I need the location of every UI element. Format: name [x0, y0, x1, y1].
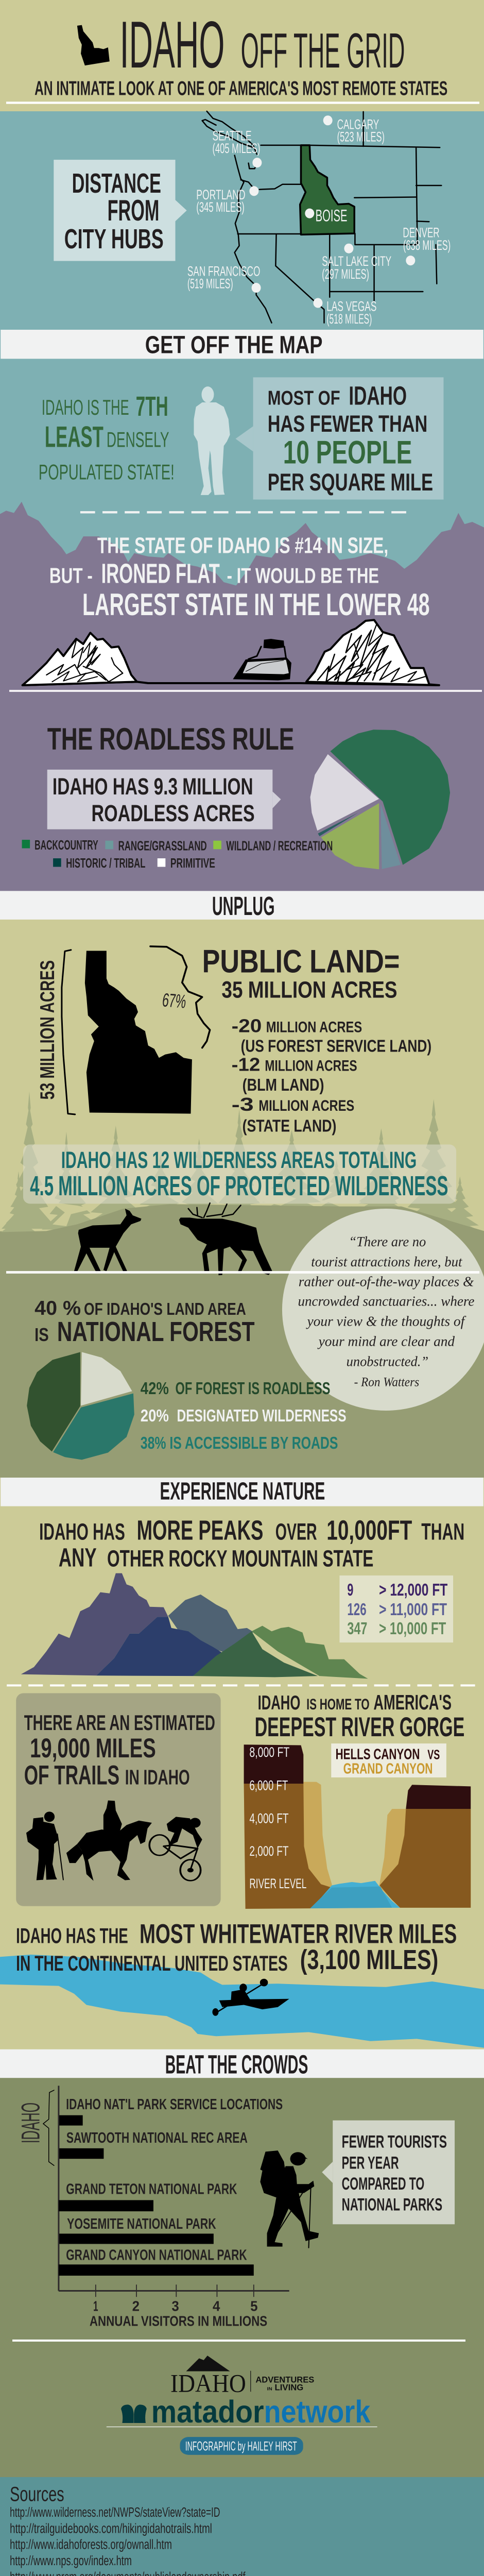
axis numbers: 1	[93, 2299, 98, 2314]
legend: forest stats	[141, 1379, 347, 1453]
city labels: LAS VEGAS	[326, 299, 376, 314]
heading: more peaks: OVER	[275, 1519, 317, 1545]
icon: Idaho state silhouette	[77, 25, 110, 65]
icon: right mountain	[306, 620, 439, 685]
legend: peak counts: 347	[347, 1619, 367, 1638]
city labels: CALGARY	[337, 117, 379, 132]
bar labels: GRAND TETON NATIONAL PARK	[66, 2181, 237, 2197]
illustration: mountains and iron	[23, 620, 439, 685]
right curly bracket	[150, 946, 210, 1048]
legend: canyons: VS	[427, 1747, 440, 1762]
legend: peak counts: 126	[347, 1600, 367, 1619]
text: DENSELY	[107, 428, 169, 452]
text block: whitewater river miles: IDAHO HAS THE	[16, 1923, 128, 1947]
city labels: (523 MILES)	[337, 129, 385, 144]
legend: forest stats: 20%	[141, 1406, 169, 1425]
Idaho highlighted on the map	[300, 145, 354, 234]
heading: public land	[202, 943, 400, 1003]
axes	[59, 2086, 289, 2297]
sources list: Sources	[10, 2482, 64, 2505]
city labels: (518 MILES)	[326, 311, 372, 327]
axis numbers: 4	[213, 2299, 220, 2314]
text block: 40 percent national forest: 40 %	[34, 1296, 81, 1319]
text block: ironed flat largest state	[49, 534, 429, 622]
bar labels	[66, 2096, 283, 2263]
callout: fewer tourists per year	[322, 2121, 455, 2224]
sources list: http://www.wilderness.net/NWPS/stateView?state=ID	[10, 2504, 220, 2520]
quote: Ron Watters	[282, 1209, 484, 1411]
list: public land breakdown: MILLION ACRES	[258, 1097, 354, 1114]
text: POPULATED STATE!	[39, 460, 175, 484]
city labels: (297 MILES)	[322, 266, 369, 282]
elevation labels	[249, 1744, 306, 1891]
illustration: Idaho 67 percent public land: 67%	[161, 990, 187, 1012]
logo text: IN	[267, 2387, 272, 2392]
bar labels: YOSEMITE NATIONAL PARK	[67, 2215, 216, 2232]
text block: 7th least densely populated: 7TH	[136, 391, 168, 422]
callout: 9.3 million roadless acres	[47, 770, 281, 829]
logo: Idaho Adventures in Living	[170, 2355, 314, 2398]
logo: matador network: matador	[151, 2394, 264, 2429]
callout: fewer tourists per year: PER YEAR	[342, 2153, 399, 2173]
quote: Ron Watters: - Ron Watters	[354, 1375, 419, 1389]
icon: left mountain	[23, 633, 137, 685]
sources list	[10, 2482, 460, 2576]
heading: more peaks: IDAHO HAS	[39, 1519, 125, 1545]
logo text: IDAHO	[170, 2369, 246, 2398]
text block: 7th least densely populated	[39, 391, 175, 484]
city markers	[249, 115, 415, 308]
list: public land breakdown: -20	[232, 1016, 262, 1037]
background: beat the crowds olive	[0, 2078, 484, 2576]
list: public land breakdown: -12	[232, 1055, 260, 1075]
sources list: http://www.nps.gov/index.htm	[10, 2553, 132, 2568]
list: public land breakdown: (BLM LAND)	[243, 1076, 324, 1094]
ground: forest floor	[0, 1204, 484, 1256]
label: Idaho brace	[17, 2090, 54, 2165]
callout: 9.3 million roadless acres: IDAHO HAS 9.3 MILLION	[53, 773, 253, 800]
panel: miles of trails: OF TRAILS	[24, 1759, 119, 1790]
quote: Ron Watters: “There are no	[349, 1234, 426, 1249]
sources list: http://www.idahoforests.org/ownall.htm	[10, 2537, 172, 2552]
callout: distance from city hubs: CITY HUBS	[64, 223, 164, 255]
text block: 40 percent national forest: NATIONAL FOREST	[57, 1316, 255, 1347]
left bracket	[62, 950, 75, 1114]
callout: distance from city hubs: FROM	[108, 194, 159, 227]
mountain range backdrop	[0, 502, 484, 598]
legend: PRIMITIVE	[170, 856, 215, 871]
city labels: DENVER	[403, 225, 440, 240]
city labels: (405 MILES)	[212, 141, 260, 156]
text: INFOGRAPHIC by HAILEY HIRST	[185, 2439, 297, 2453]
callout: fewer than 10 people per square mile: MOST OF	[268, 386, 340, 409]
list: public land breakdown: MILLION ACRES	[265, 1057, 357, 1074]
text block: 7th least densely populated: LEAST	[45, 420, 103, 453]
bar chart: annual visitors in millions	[17, 2086, 289, 2329]
city labels: (519 MILES)	[187, 276, 233, 291]
list: public land breakdown	[232, 1016, 431, 1136]
icon: hiker	[26, 1811, 63, 1880]
callout: fewer than 10 people per square mile: IDAHO	[349, 381, 407, 411]
list: public land breakdown: MILLION ACRES	[266, 1018, 362, 1036]
city labels: SEATTLE	[212, 128, 252, 143]
axis numbers: ANNUAL VISITORS IN MILLIONS	[90, 2314, 267, 2329]
callout: fewer than 10 people per square mile	[235, 377, 443, 500]
text block: 40 percent national forest	[34, 1296, 255, 1347]
legend: canyons	[331, 1743, 446, 1777]
bar labels: SAWTOOTH NATIONAL REC AREA	[66, 2129, 248, 2146]
background: sources teal	[0, 2477, 484, 2576]
legend: BACKCOUNTRY	[34, 838, 98, 853]
heading: deepest river gorge	[255, 1691, 464, 1742]
title block: IDAHO	[120, 7, 224, 81]
legend: forest stats: 42%	[141, 1379, 169, 1398]
text block: ironed flat largest state: BUT -	[49, 563, 93, 587]
section heading: unplug	[0, 891, 484, 921]
logo: matador network	[107, 2394, 377, 2429]
quote: Ron Watters: unobstructed.”	[347, 1353, 428, 1369]
icon: logo mountain	[186, 2355, 230, 2371]
bar labels: IDAHO NAT'L PARK SERVICE LOCATIONS	[66, 2096, 283, 2113]
city labels: BOISE	[316, 207, 347, 225]
text block: 7th least densely populated: IDAHO IS THE	[42, 395, 129, 419]
section heading: beat the crowds	[0, 2049, 484, 2079]
icon: large Idaho silhouette	[85, 951, 192, 1114]
logo: matador network: network	[264, 2394, 371, 2429]
icon: backpacker	[260, 2150, 319, 2248]
legend: RANGE/GRASSLAND	[118, 838, 207, 853]
panel: miles of trails: 19,000 MILES	[30, 1733, 156, 1764]
legend: peak counts: 9	[347, 1581, 353, 1599]
map lines	[202, 111, 441, 323]
legend: HISTORIC / TRIBAL	[66, 856, 145, 871]
axis numbers: 2	[132, 2299, 140, 2314]
axis numbers	[90, 2299, 267, 2329]
text block: 40 percent national forest: OF IDAHO'S LAND AREA	[84, 1300, 246, 1318]
illustration: forest of conifers	[0, 1091, 484, 1235]
elevation labels: 2,000 FT	[249, 1843, 289, 1859]
list: public land breakdown: -3	[232, 1095, 254, 1115]
label: Idaho brace: IDAHO	[17, 2103, 45, 2143]
heading: deepest river gorge: IDAHO	[258, 1691, 300, 1714]
pie chart: roadless acres	[310, 730, 450, 869]
icon: horse and rider	[66, 1801, 152, 1881]
heading: more peaks: MORE PEAKS	[137, 1515, 263, 1546]
text: THERE ARE AN ESTIMATED	[24, 1710, 215, 1735]
chart: Hells Canyon vs Grand Canyon profile	[244, 1743, 471, 1909]
logo text: LIVING	[275, 2383, 303, 2392]
icon: deer	[74, 1209, 142, 1273]
city labels: SALT LAKE CITY	[322, 253, 391, 269]
legend: forest stats: DESIGNATED WILDERNESS	[177, 1406, 347, 1425]
section heading: get off the map	[1, 330, 483, 359]
logo text: ADVENTURES	[255, 2375, 314, 2385]
panel: the roadless rule	[22, 722, 450, 871]
callout: distance from city hubs: DISTANCE	[72, 167, 161, 198]
elevation labels: 8,000 FT	[249, 1744, 289, 1760]
illustration: river	[0, 1955, 484, 2048]
axis numbers: 3	[171, 2299, 179, 2314]
pie chart: national forest	[27, 1352, 134, 1460]
axis numbers: 5	[250, 2299, 258, 2314]
section heading: get off the map: GET OFF THE MAP	[145, 331, 322, 359]
section heading: experience nature	[1, 1477, 483, 1506]
background: distance and map teal	[0, 111, 484, 590]
background: header khaki	[0, 0, 484, 111]
icon: matador mark	[121, 2404, 147, 2423]
legend: peak counts	[339, 1575, 453, 1642]
elevation labels: 4,000 FT	[249, 1810, 289, 1826]
map: western states with distances	[187, 111, 451, 327]
background: unplug khaki	[0, 920, 484, 1291]
callout: 9.3 million roadless acres: ROADLESS ACRES	[91, 800, 255, 826]
icon: person silhouette	[194, 386, 230, 495]
baseline curve	[23, 682, 439, 685]
icon: elk	[179, 1203, 272, 1275]
city labels: PORTLAND	[196, 187, 246, 202]
text block: 40 percent national forest: IS	[34, 1325, 49, 1345]
legend: forest stats: OF FOREST IS ROADLESS	[176, 1379, 330, 1398]
legend	[22, 838, 333, 871]
panel: the roadless rule: WILDLAND / RECREATION	[226, 838, 333, 853]
illustration: layered peaks	[21, 1573, 368, 1679]
bar labels: GRAND CANYON NATIONAL PARK	[66, 2247, 247, 2263]
icon: flat iron	[233, 639, 291, 681]
text block: ironed flat largest state: IRONED FLAT	[101, 557, 220, 589]
background: forest section olive	[0, 1231, 484, 1478]
list: public land breakdown: (STATE LAND)	[243, 1116, 336, 1136]
section heading: unplug: UNPLUG	[212, 892, 275, 921]
icon: mountain biker	[149, 1817, 202, 1880]
city labels: (345 MILES)	[196, 199, 245, 215]
elevation labels: 6,000 FT	[249, 1778, 288, 1793]
heading: more peaks	[39, 1515, 464, 1572]
text block: whitewater river miles	[16, 1918, 457, 1975]
panel: miles of trails: IN IDAHO	[125, 1766, 190, 1789]
background: roadless purple	[0, 587, 484, 891]
background: nature khaki	[0, 1506, 484, 2049]
label: 53 million acres: 53 MILLION ACRES	[37, 960, 59, 1099]
panel: miles of trails	[16, 1693, 221, 1906]
bars	[59, 2115, 254, 2276]
title block	[6, 7, 479, 104]
callout: distance from city hubs	[54, 160, 187, 261]
icon: kayaker	[212, 1979, 289, 2016]
city labels: SAN FRANCISCO	[187, 264, 260, 279]
credit badge: infographic by Hailey Hirst	[180, 2437, 303, 2455]
banner: wilderness areas	[23, 1145, 456, 1204]
heading: deepest river gorge: IS HOME TO	[306, 1696, 370, 1713]
illustration: Idaho 67 percent public land	[37, 946, 210, 1114]
city labels	[187, 117, 451, 327]
sources list: http://trailguidebooks.com/hikingidahotrails.html	[10, 2521, 212, 2536]
icon: deer and elk	[74, 1203, 272, 1275]
chart: Hells Canyon vs Grand Canyon profile: RIVER LEVEL	[249, 1876, 306, 1891]
light gaps between lower branches	[51, 1192, 407, 1226]
heading: more peaks: ANY	[59, 1543, 97, 1572]
river in the gorge	[310, 1881, 400, 1908]
